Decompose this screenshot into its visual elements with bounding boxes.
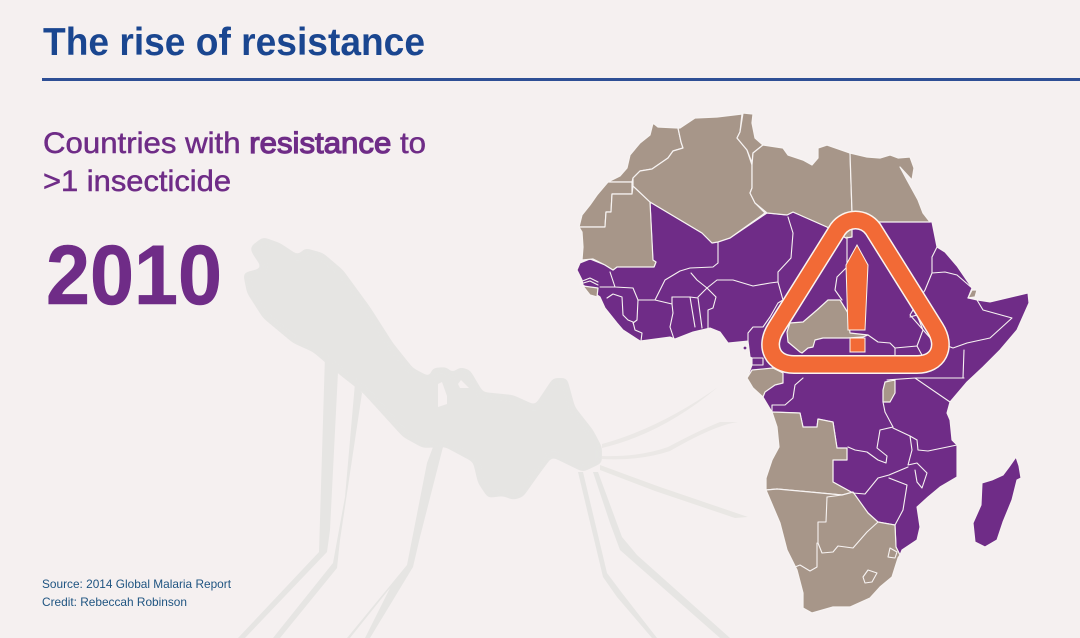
sub-Saharan resistance silhouette — [577, 202, 1029, 555]
country borders — [580, 217, 1012, 583]
Mauritania — [579, 186, 656, 270]
Algeria — [633, 114, 765, 243]
subtitle second line: >1 insecticide — [43, 165, 231, 198]
exclamation stem — [846, 245, 868, 330]
tan countries, north — [579, 113, 930, 270]
West African borders — [610, 242, 718, 300]
title: The rise of resistance — [43, 21, 425, 64]
Tunisia — [737, 113, 763, 163]
Central African Republic — [787, 300, 868, 353]
warning triangle — [771, 220, 940, 364]
Burundi and Rwanda — [883, 380, 895, 402]
Guinea-Bissau — [583, 286, 598, 297]
title rule — [42, 78, 1080, 81]
Western Sahara — [579, 182, 632, 227]
year: 2010 — [46, 228, 222, 322]
Madagascar — [973, 457, 1021, 547]
Libya — [750, 145, 852, 238]
exclamation dot — [850, 338, 865, 352]
subtitle: Countries with resistance to — [43, 127, 426, 160]
tan countries, centre and south — [583, 286, 977, 613]
mosquito silhouette — [238, 237, 748, 638]
source credit: Credit: Rebeccah Robinson — [42, 595, 187, 609]
Angola — [766, 412, 853, 495]
map of Africa — [577, 113, 1029, 613]
southern borders — [818, 497, 878, 553]
source credit: Source: 2014 Global Malaria Report — [42, 577, 232, 591]
Egypt — [850, 153, 930, 222]
source credit — [42, 577, 232, 609]
north-east borders — [835, 237, 847, 300]
island dots — [744, 347, 746, 349]
Gabon — [747, 368, 783, 397]
southern Africa — [766, 489, 900, 613]
Morocco — [608, 123, 683, 182]
Djibouti — [968, 290, 977, 298]
